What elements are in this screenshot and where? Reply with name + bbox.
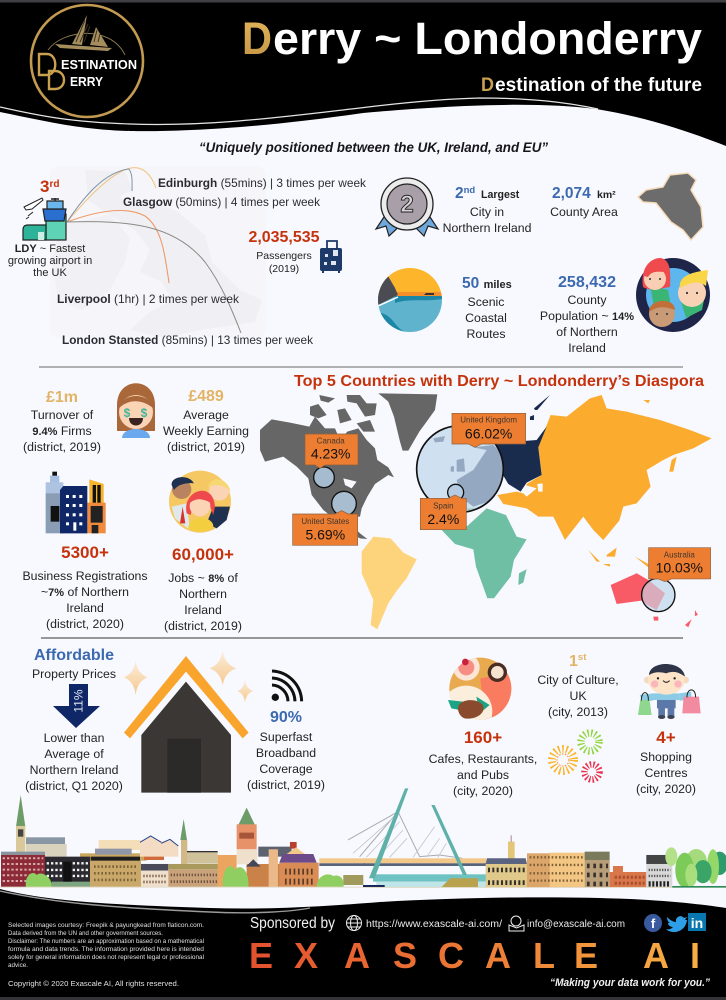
stat: shopping centres: Centres: [644, 766, 688, 780]
stat: shopping centres: (city, 2020): [636, 782, 696, 796]
icon: globe: [346, 916, 362, 930]
stat: city of culture: st: [578, 652, 587, 663]
callout: Australia 10.03%: [649, 548, 711, 582]
footer band: [0, 889, 726, 1000]
icon: facebook: f: [651, 916, 656, 931]
icon: face with dollar eyes: $: [124, 406, 131, 420]
region: Africa: [442, 508, 527, 598]
passengers stat: [248, 229, 320, 275]
icon: down arrow 11%: [53, 684, 100, 728]
stat: city of culture: [537, 652, 619, 719]
icon: wifi: [272, 671, 302, 701]
stat: cafes: 160+: [464, 728, 502, 747]
region: Greenland: [378, 393, 437, 451]
callout: United States 5.69%: United States: [301, 517, 349, 526]
airport caption: growing airport in: [8, 255, 92, 267]
stat: affordable property: Northern Ireland: [30, 763, 119, 777]
passengers stat: 2,035,535: [248, 229, 320, 246]
Liverpool label: Liverpool (1hr) | 2 times per week: [57, 292, 239, 306]
stat: broadband: [247, 709, 325, 792]
stat: turnover: (district, 2019): [23, 440, 101, 454]
passengers stat: (2019): [269, 263, 299, 275]
logo: Destination Derry: [31, 5, 143, 117]
stat: affordable property: Average of: [44, 747, 104, 761]
rank 3rd: rd: [49, 179, 59, 190]
passengers stat: Passengers: [256, 250, 312, 262]
region: Arctic islands: [310, 395, 377, 432]
stat: shopping centres: Shopping: [640, 750, 692, 764]
stat: county population: Ireland: [568, 341, 606, 355]
stat: jobs: 60,000+: [172, 545, 234, 564]
stat: weekly earning: £489: [188, 388, 224, 405]
stat: broadband: (district, 2019): [247, 778, 325, 792]
callout: Spain 2.4%: 2.4%: [427, 511, 459, 527]
stat: county population: Population ~ 14%: [540, 309, 634, 323]
Edinburgh label: Edinburgh (55mins) | 3 times per week: [158, 176, 366, 190]
region: Australia: [611, 573, 698, 627]
callout: United Kingdom 66.02%: [452, 413, 526, 447]
stat: cafes: (city, 2020): [453, 784, 513, 798]
sponsored by: Sponsored by: [250, 915, 335, 932]
region: Europe: [493, 395, 550, 492]
stat: cafes: Cafes, Restaurants,: [429, 752, 537, 766]
icon: fireworks: [552, 733, 600, 780]
stat: city of culture: UK: [569, 689, 587, 703]
stat: shopping centres: 4+: [656, 728, 676, 747]
chart: diaspora world map: [260, 393, 712, 629]
stat: 2nd largest city: nd: [464, 185, 475, 196]
subtitle: estination of the future: [495, 75, 702, 96]
disclaimer text: formula and data trends. The information provided here is intended: [8, 946, 205, 953]
stat: county population: of Northern: [556, 325, 618, 339]
region: North America: [260, 417, 394, 539]
tagline quote: “Uniquely positioned between the UK, Ireland, and EU”: [199, 139, 548, 155]
stat: 2nd largest city: City in: [470, 205, 504, 219]
stat: 2nd largest city: [443, 185, 532, 235]
icon: people on globe: [636, 258, 710, 332]
icon: face with dollar eyes: $: [141, 406, 148, 420]
route: Glasgow: [67, 169, 132, 222]
stat: broadband: Superfast: [260, 730, 313, 744]
icon: second place medal: [376, 178, 438, 236]
stat: cafes: and Pubs: [457, 768, 509, 782]
disclaimer text: solely for general information does not represent legal or professional: [8, 954, 204, 961]
stat: business registrations: [22, 543, 148, 631]
icon: suitcase: [320, 241, 342, 273]
logo: Destination Derry: ERRY: [70, 74, 103, 89]
stat: 2nd largest city: Largest: [481, 189, 520, 201]
bubble: Canada: [314, 467, 334, 488]
stat: weekly earning: (district, 2019): [167, 440, 245, 454]
stat: jobs: Ireland: [184, 603, 222, 617]
title: D: [242, 13, 272, 64]
panel: property and city life: [25, 647, 701, 798]
icon: facebook: [644, 914, 662, 932]
route: Edinburgh: [67, 168, 156, 222]
stat: turnover: 9.4% Firms: [32, 424, 92, 438]
stat: jobs: [164, 545, 242, 633]
stat: county population: 258,432: [558, 274, 616, 291]
stat: weekly earning: Weekly Earning: [163, 424, 249, 438]
icon: linkedin: in: [691, 915, 703, 931]
icon: second place medal: 2: [400, 191, 414, 218]
faded UK and Ireland map: [50, 166, 266, 338]
route: London Stansted: [67, 222, 241, 333]
icon: county outline: [638, 173, 703, 240]
slogan: “Making your data work for you.”: [550, 977, 710, 989]
stat: shopping centres: [636, 728, 696, 796]
icon: office buildings: [46, 472, 106, 533]
callout: Canada 4.23%: 4.23%: [311, 446, 350, 462]
stat: county area: 2,074: [552, 185, 591, 202]
stat: scenic coastal routes: 50 miles: [462, 275, 512, 292]
bubble: United Kingdom: [417, 426, 505, 517]
airport caption: the UK: [33, 267, 67, 279]
icon: coast: [378, 268, 442, 332]
panel: flight routes map: [8, 166, 366, 347]
icon: twitter: [666, 916, 687, 932]
callout: Canada 4.23%: [305, 434, 358, 468]
callout: Australia 10.03%: 10.03%: [656, 560, 703, 576]
disclaimer text: advice.: [8, 962, 28, 969]
callout: Australia 10.03%: Australia: [664, 550, 695, 559]
callout: Spain 2.4%: [420, 495, 466, 530]
stat: jobs: (district, 2019): [164, 619, 242, 633]
disclaimer text: [8, 922, 205, 969]
stat: scenic coastal routes: Coastal: [465, 311, 507, 325]
stat: affordable property: (district, Q1 2020): [25, 779, 123, 793]
stat: scenic coastal routes: [462, 275, 512, 341]
disclaimer text: Data derived from the UN and other government sources.: [8, 930, 163, 937]
website: https://www.exascale-ai.com/: [366, 919, 502, 930]
stat: county area: km²: [597, 189, 616, 201]
copyright: Copyright © 2020 Exascale AI, All rights reserved.: [8, 979, 179, 988]
stat: 2nd largest city: Northern Ireland: [443, 221, 532, 235]
icon: mail: [509, 916, 524, 931]
header band: [0, 0, 726, 146]
stat: jobs: Northern: [179, 587, 227, 601]
callout: United States 5.69%: 5.69%: [305, 526, 345, 542]
icon: team of people: [169, 471, 231, 533]
airport caption: LDY ~ Fastest: [15, 243, 85, 255]
London Stansted label: London Stansted (85mins) | 13 times per week: [62, 333, 313, 347]
stat: business registrations: ~7% of Northern: [41, 585, 129, 599]
stat: county population: [540, 274, 634, 355]
stat: county area: [550, 185, 618, 219]
stat: affordable property: Affordable: [34, 647, 114, 664]
stat: 2nd largest city: 2: [455, 185, 464, 202]
skyline: Peace Bridge and east side: [348, 788, 726, 888]
stat: business registrations: 5300+: [61, 543, 109, 562]
icon: house: [124, 651, 253, 793]
sponsor wordmark: EXASCALE AI: [249, 935, 700, 976]
icon: shopper: [638, 664, 701, 719]
stat: scenic coastal routes: Scenic: [468, 295, 504, 309]
illustration: city skyline: [0, 788, 726, 888]
stat: turnover: Turnover of: [31, 408, 94, 422]
stat: broadband: Coverage: [259, 762, 313, 776]
stat: business registrations: Business Registrations: [22, 569, 148, 583]
airport caption: [8, 243, 92, 279]
bubble: Spain: [448, 484, 464, 500]
disclaimer text: Disclaimer: The numbers are an approximation based on a mathematical: [8, 938, 204, 945]
stat: city of culture: 1: [569, 653, 578, 670]
title: erry ~ Londonderry: [273, 13, 702, 64]
stat: affordable property: [25, 647, 123, 793]
subtitle: D: [481, 75, 494, 96]
icon: airport: [23, 198, 66, 240]
stat: weekly earning: Average: [183, 408, 229, 422]
bubble: United States: [332, 491, 356, 516]
callout: United Kingdom 66.02%: 66.02%: [465, 425, 512, 441]
stat: weekly earning: [163, 388, 249, 454]
heading: diaspora: Top 5 Countries with Derry ~ Londonderry’s Diaspora: [294, 373, 704, 390]
stat: business registrations: Ireland: [66, 601, 104, 615]
icon: face with dollar eyes: [117, 383, 155, 438]
region: South America: [362, 537, 417, 629]
stat: affordable property: Lower than: [44, 731, 105, 745]
stat: cafes: [429, 728, 537, 798]
panel: economy facts: [22, 383, 249, 633]
stat: affordable property: Property Prices: [32, 667, 116, 681]
callout: United Kingdom 66.02%: United Kingdom: [460, 416, 517, 425]
region: Asia: [497, 395, 712, 567]
panel: city facts: [376, 173, 710, 355]
callout: Spain 2.4%: Spain: [433, 501, 454, 510]
stat: scenic coastal routes: Routes: [467, 327, 505, 341]
callout: United States 5.69%: [293, 511, 358, 545]
Glasgow label: Glasgow (50mins) | 4 times per week: [123, 195, 320, 209]
disclaimer text: Selected images courtesy: Freepik & payungkead from flaticon.com.: [8, 922, 204, 929]
skyline: west side: [0, 795, 366, 888]
stat: jobs: Jobs ~ 8% of: [168, 571, 238, 585]
stat: turnover: £1m: [46, 389, 78, 406]
bubble: Australia: [640, 578, 675, 612]
stat: county population: County: [568, 293, 607, 307]
stat: county area: County Area: [550, 205, 618, 219]
icon: food plate: [448, 658, 512, 720]
route: Liverpool: [67, 211, 169, 283]
icon: linkedin: [688, 913, 706, 931]
stat: city of culture: (city, 2013): [548, 705, 608, 719]
email: info@exascale-ai.com: [527, 919, 625, 930]
stat: city of culture: City of Culture,: [537, 673, 619, 687]
stat: business registrations: (district, 2020): [46, 617, 124, 631]
stat: broadband: Broadband: [256, 746, 316, 760]
stat: broadband: 90%: [270, 709, 302, 726]
callout: Canada 4.23%: Canada: [317, 436, 345, 445]
rank 3rd: 3: [40, 177, 49, 196]
logo: Destination Derry: ESTINATION: [61, 57, 137, 72]
stat: turnover: [23, 389, 101, 454]
icon: down arrow 11%: 11%: [72, 689, 86, 713]
